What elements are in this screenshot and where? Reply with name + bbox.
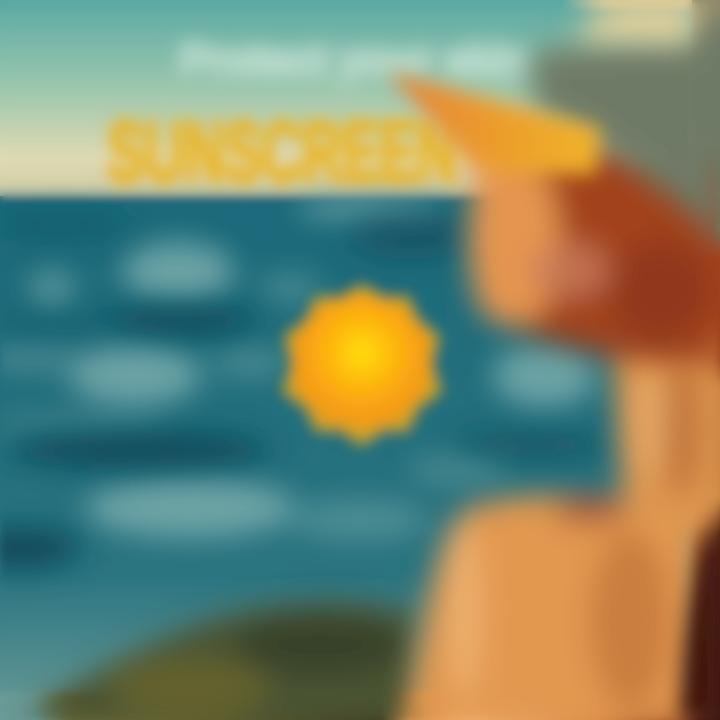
sea background	[0, 196, 720, 720]
hat brim	[388, 72, 600, 175]
wave highlights	[0, 197, 597, 540]
hair behind shoulder	[680, 510, 720, 720]
figure: woman in sun hat	[388, 0, 720, 720]
face and hair	[469, 145, 720, 362]
wave shadows	[0, 211, 610, 568]
neck	[612, 330, 720, 540]
shoulder and arm	[405, 360, 700, 720]
headline: small white line: Protect your skin	[180, 35, 530, 84]
icon: sun	[282, 284, 442, 446]
sky background	[0, 0, 720, 198]
headline: yellow title: SUNSCREEN	[107, 102, 457, 201]
rock foreground	[20, 602, 420, 720]
hat top	[575, 0, 700, 45]
hat crown	[530, 30, 720, 240]
